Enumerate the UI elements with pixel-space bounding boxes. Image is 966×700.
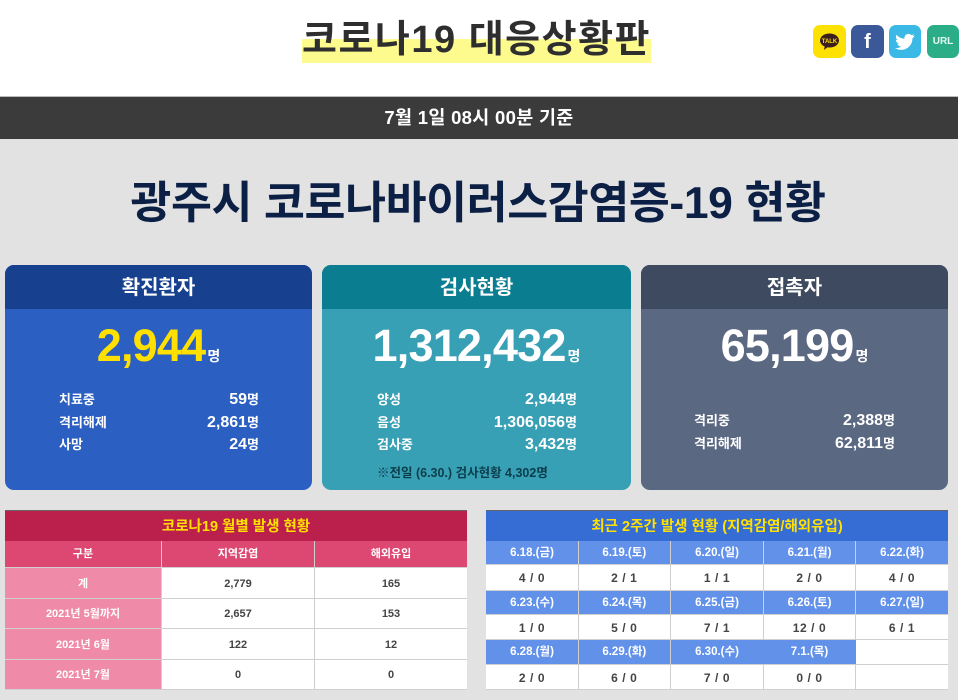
row: released: 2,861명 xyxy=(207,414,259,431)
week 1 dates xyxy=(486,541,948,564)
week 2 values: 7 / 1 xyxy=(704,621,730,635)
week 2 dates: 6.23.(수) xyxy=(510,597,554,609)
week 3 values: 7 / 0 xyxy=(704,671,730,685)
share icons xyxy=(813,25,959,58)
monthly header row xyxy=(5,541,467,567)
week 1 values: 2 / 1 xyxy=(611,571,637,585)
week 2 dates: 6.27.(일) xyxy=(880,597,924,609)
row: July 2021: 2021년 7월 xyxy=(56,669,110,681)
week 3 dates: 7.1.(목) xyxy=(791,646,828,658)
row: total xyxy=(5,568,467,598)
row: negative: 음성 xyxy=(377,415,401,430)
row: through May 2021: 2,657 xyxy=(224,608,252,620)
icon: url xyxy=(927,25,959,58)
icon: facebook xyxy=(851,25,884,58)
week 1 values: 2 / 0 xyxy=(796,571,823,585)
icon: kakao talk: TALK xyxy=(822,39,838,45)
row: July 2021 xyxy=(5,660,467,689)
icon: url: URL xyxy=(933,36,953,47)
tests total: 1,312,432명 xyxy=(373,320,580,371)
row: June 2021: 12 xyxy=(385,639,397,651)
row: released xyxy=(694,435,895,452)
row: deaths xyxy=(59,436,259,453)
monthly header row: 구분 xyxy=(73,548,93,560)
monthly table title: 코로나19 월별 발생 현황 xyxy=(162,519,310,535)
monthly table xyxy=(5,510,467,690)
week 1 values xyxy=(486,565,948,590)
row: July 2021: 0 xyxy=(388,669,394,681)
row: total: 2,779 xyxy=(224,578,252,590)
week 2 values: 5 / 0 xyxy=(611,621,637,635)
row: released: 62,811명 xyxy=(835,435,895,452)
week 1 dates: 6.18.(금) xyxy=(510,547,554,559)
row: July 2021: 0 xyxy=(235,669,241,681)
row: released: 격리해제 xyxy=(59,415,107,430)
row: in treatment xyxy=(59,391,259,408)
week 1 dates: 6.22.(화) xyxy=(880,547,924,559)
week 1 dates: 6.20.(일) xyxy=(695,547,739,559)
row: through May 2021 xyxy=(5,599,467,628)
row: June 2021 xyxy=(5,629,467,659)
confirmed total: 2,944명 xyxy=(97,320,220,371)
week 1 dates: 6.19.(토) xyxy=(602,547,646,559)
week 2 dates: 6.25.(금) xyxy=(695,597,739,609)
panel heading: 확진환자 xyxy=(122,277,195,299)
panel: testing status xyxy=(322,265,631,490)
panel: contacts xyxy=(641,265,948,490)
panel: confirmed patients xyxy=(5,265,312,490)
row: testing: 3,432명 xyxy=(525,436,577,453)
row: total: 계 xyxy=(78,578,88,590)
row: in quarantine xyxy=(694,412,895,429)
row: deaths: 사망 xyxy=(59,437,83,452)
row: in treatment: 치료중 xyxy=(59,392,95,407)
week 2 dates: 6.26.(토) xyxy=(788,597,831,609)
row: released xyxy=(59,414,259,431)
week 2 values: 6 / 1 xyxy=(889,621,915,635)
monthly header row: 지역감염 xyxy=(218,548,258,560)
panel heading: 검사현황 xyxy=(440,277,513,299)
week 2 values xyxy=(486,615,948,639)
icon: kakao talk xyxy=(813,25,846,58)
week 1 values: 4 / 0 xyxy=(889,571,915,585)
panel heading xyxy=(322,265,631,309)
row: negative: 1,306,056명 xyxy=(494,414,577,431)
row: in quarantine: 격리중 xyxy=(694,413,730,428)
two-week table xyxy=(486,510,948,690)
week 3 values xyxy=(486,665,948,689)
row: in quarantine: 2,388명 xyxy=(843,412,895,429)
panel heading: 접촉자 xyxy=(767,277,822,299)
week 1 values: 1 / 1 xyxy=(704,571,730,585)
two-week table title xyxy=(486,510,948,541)
row: negative xyxy=(377,414,577,431)
week 1 dates: 6.21.(월) xyxy=(788,547,831,559)
week 3 dates xyxy=(486,640,948,664)
two-week table title: 최근 2주간 발생 현황 (지역감염/해외유입) xyxy=(591,519,843,535)
row: positive: 2,944명 xyxy=(525,391,577,408)
row: testing: 검사중 xyxy=(377,437,413,452)
week 3 values: 0 / 0 xyxy=(796,671,823,685)
week 1 values: 4 / 0 xyxy=(519,571,545,585)
week 2 dates xyxy=(486,591,948,614)
row: June 2021: 2021년 6월 xyxy=(56,639,110,651)
panel heading xyxy=(641,265,948,309)
week 2 values: 1 / 0 xyxy=(519,621,545,635)
panel heading xyxy=(5,265,312,309)
week 3 values: 2 / 0 xyxy=(519,671,545,685)
monthly table title xyxy=(5,510,467,541)
row: released: 격리해제 xyxy=(694,436,742,451)
page title: 코로나19 대응상황판 xyxy=(302,19,651,61)
week 2 values: 12 / 0 xyxy=(793,621,826,635)
contacts total: 65,199명 xyxy=(721,320,868,371)
date bar: 7월 1일 08시 00분 기준 xyxy=(384,107,574,128)
week 2 dates: 6.24.(목) xyxy=(602,597,646,609)
row: through May 2021: 2021년 5월까지 xyxy=(46,608,120,620)
row: testing xyxy=(377,436,577,453)
week 3 dates: 6.28.(월) xyxy=(510,646,554,658)
date bar xyxy=(0,96,958,139)
icon: facebook: f xyxy=(864,31,871,53)
row: total: 165 xyxy=(382,578,400,590)
week 3 values: 6 / 0 xyxy=(611,671,637,685)
row: in treatment: 59명 xyxy=(229,391,259,408)
row: through May 2021: 153 xyxy=(382,608,400,620)
icon: twitter xyxy=(889,25,921,58)
row: deaths: 24명 xyxy=(229,436,259,453)
main heading: 광주시 코로나바이러스감염증-19 현황 xyxy=(130,179,826,228)
row: June 2021: 122 xyxy=(229,639,247,651)
row: positive xyxy=(377,391,577,408)
week 3 dates: 6.29.(화) xyxy=(602,646,646,658)
monthly header row: 해외유입 xyxy=(371,548,411,560)
week 3 dates: 6.30.(수) xyxy=(695,646,739,658)
row: positive: 양성 xyxy=(377,392,401,407)
previous day note: ※전일 (6.30.) 검사현황 4,302명 xyxy=(377,466,548,480)
